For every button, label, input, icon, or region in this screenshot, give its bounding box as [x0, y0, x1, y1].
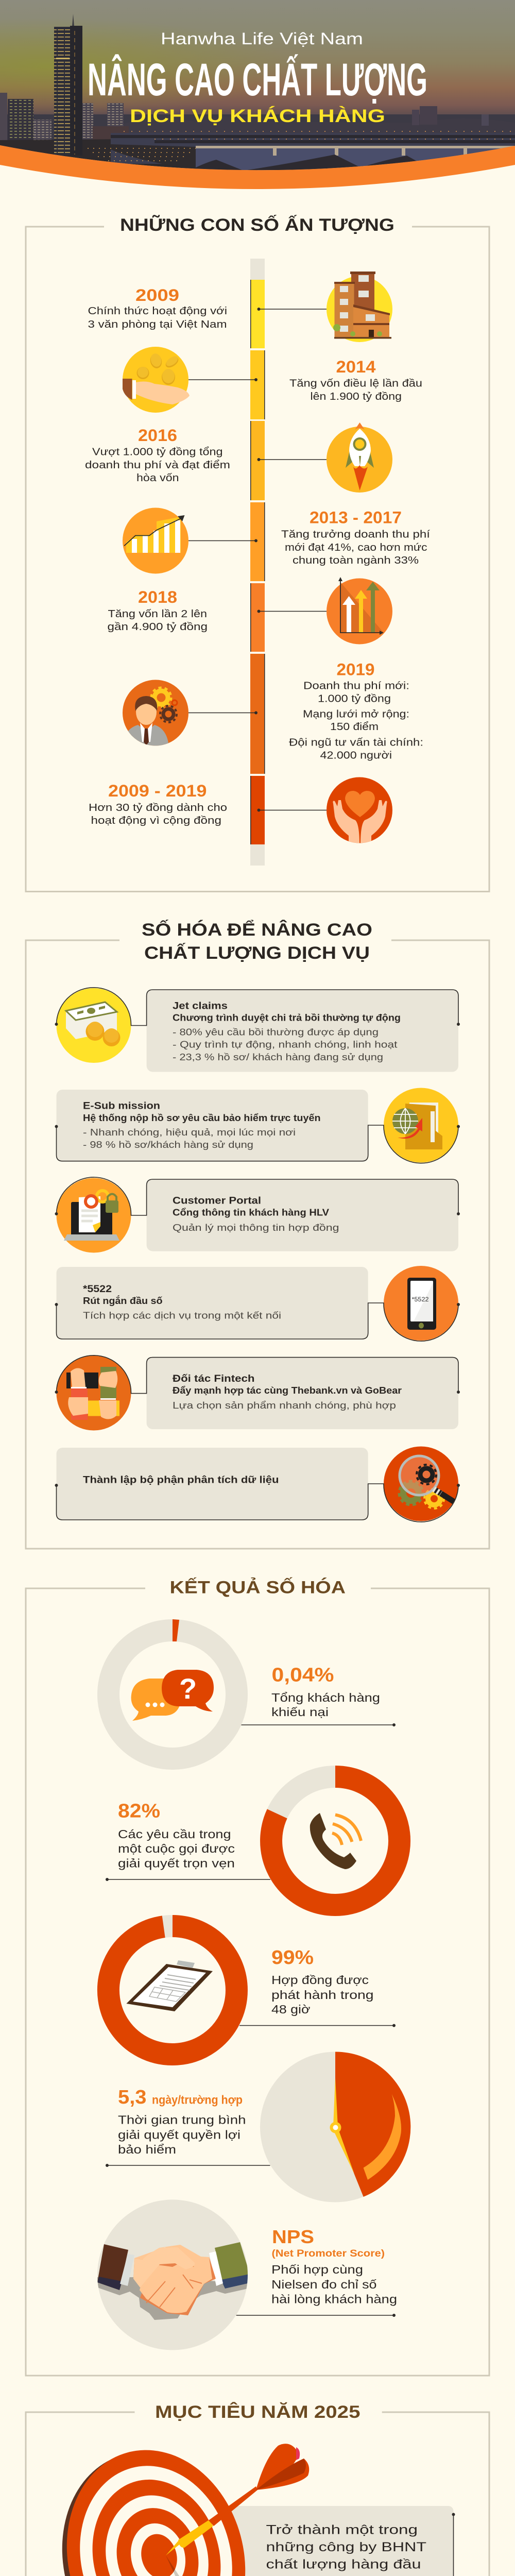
- milestone 2009-2019 text: [89, 782, 227, 826]
- result text: 5,3 days per case: [118, 2087, 246, 2156]
- milestone 2014 text: Tăng vốn điều lệ lần đầu: [289, 378, 422, 389]
- milestone 2016 text: doanh thu phí và đạt điểm: [85, 460, 230, 471]
- icon: hand with coins: [123, 347, 190, 413]
- card text: Tích hợp các dịch vụ trong một kết nối: [83, 1311, 281, 1321]
- milestone 2014 text: 2014: [336, 358, 376, 376]
- icon: clipboard: [126, 1960, 213, 2011]
- result text: NPS: Phối hợp cùng: [271, 2263, 363, 2276]
- icon: businessman with gears: [123, 680, 188, 747]
- card text: Hệ thống nộp hồ sơ yêu cầu bảo hiểm trực tuyến: [83, 1113, 320, 1123]
- card text: Cổng thông tin khách hàng HLV: [173, 1208, 329, 1218]
- heading: số hóa để nâng cao chất lượng dịch vụ: SỐ HÓA ĐỂ NÂNG CAO: [142, 920, 372, 940]
- card text: - Quy trình tự động, nhanh chóng, linh hoạt: [173, 1040, 398, 1050]
- result text: 5,3 days per case: 5,3: [118, 2087, 146, 2108]
- hero orange swoosh: [0, 145, 515, 189]
- card: E-Sub mission: [55, 1088, 460, 1163]
- milestone 2019 text: 1.000 tỷ đồng: [318, 693, 391, 705]
- NPS circle with handshake: [97, 2200, 252, 2350]
- result text: 82%: [118, 1800, 235, 1870]
- milestone 2009-2019 text: Hơn 30 tỷ đồng dành cho: [89, 802, 227, 814]
- brand line: Hanwha Life Việt Nam: [161, 29, 363, 48]
- result text: 5,3 days per case: bảo hiểm: [118, 2143, 176, 2156]
- milestone 2018 text: gần 4.900 tỷ đồng: [107, 621, 208, 633]
- panel: timeline section: [26, 215, 489, 891]
- card text: Jet claims: [173, 1001, 228, 1012]
- milestone 2016 text: [85, 426, 230, 484]
- icon: cash and coins: [66, 1002, 121, 1046]
- card text: [173, 1374, 402, 1411]
- heading: số hóa để nâng cao chất lượng dịch vụ: CHẤT LƯỢNG DỊCH VỤ: [144, 943, 370, 963]
- hero title block: [88, 29, 427, 126]
- icon: hands holding heart: [327, 777, 392, 845]
- result text: 0,04%: 0,04%: [272, 1664, 334, 1686]
- milestone 2018 text: Tăng vốn lần 2 lên: [108, 608, 207, 620]
- callout: goal statement: những công by BHNT: [266, 2540, 426, 2554]
- result text: 0,04%: khiếu nại: [271, 1705, 329, 1719]
- icon: laptop, document, lock: [64, 1191, 119, 1241]
- milestone 2014 text: lên 1.900 tỷ đồng: [310, 391, 402, 402]
- milestone 2018 text: 2018: [138, 588, 177, 606]
- card text: [83, 1100, 320, 1150]
- card text: - 98 % hồ sơ/khách hàng sử dụng: [83, 1140, 253, 1150]
- milestone 2019 text: Đội ngũ tư vấn tài chính:: [289, 737, 423, 748]
- result connector lines: [106, 1723, 396, 2317]
- result text: 5,3 days per case: ngày/trường hợp: [152, 2093, 243, 2106]
- result text: NPS: [271, 2226, 397, 2306]
- icon: four joined hands: [66, 1367, 119, 1420]
- milestone 2009 text: 2009: [135, 286, 179, 304]
- donut chart: 0,04%: [108, 1619, 237, 1759]
- icon: rising arrows: [327, 577, 392, 644]
- result text: 99%: 99%: [271, 1947, 314, 1969]
- milestone 2016 text: Vượt 1.000 tỷ đồng tổng: [92, 446, 222, 457]
- timeline connectors: [188, 308, 327, 812]
- result text: 99%: phát hành trong: [271, 1988, 374, 2002]
- card: data analytics: [55, 1447, 460, 1522]
- hero banner: city skyline at dusk: [0, 0, 515, 178]
- heading: kết quả số hóa: KẾT QUẢ SỐ HÓA: [170, 1578, 346, 1597]
- clock chart: 5,3 days: [260, 2052, 410, 2202]
- callout: goal statement: chất lượng hàng đầu: [266, 2557, 421, 2572]
- card text: E-Sub mission: [83, 1100, 160, 1112]
- dart: [166, 2444, 309, 2555]
- subtitle: DỊCH VỤ KHÁCH HÀNG: [130, 106, 385, 126]
- milestone 2009-2019 text: hoạt động vì cộng đồng: [91, 815, 221, 826]
- milestone 2019 text: Doanh thu phí mới:: [303, 680, 409, 691]
- card text: Customer Portal: [173, 1195, 261, 1207]
- card text: - 23,3 % hồ sơ/ khách hàng đang sử dụng: [173, 1052, 383, 1062]
- card text: Đối tác Fintech: [173, 1374, 254, 1384]
- milestone 2009-2019 text: 2009 - 2019: [108, 782, 207, 800]
- icon: office building: [327, 272, 392, 342]
- icon: telephone: [310, 1813, 361, 1869]
- result text: 5,3 days per case: Thời gian trung bình: [118, 2113, 246, 2127]
- result text: NPS: hài lòng khách hàng: [271, 2293, 397, 2306]
- card text: [83, 1284, 281, 1321]
- milestone 2013-2017 text: 2013 - 2017: [310, 508, 402, 527]
- callout: goal statement: Trở thành một trong: [266, 2522, 418, 2537]
- heading: những con số ấn tượng: NHỮNG CON SỐ ẤN TƯỢNG: [120, 215, 394, 235]
- card text: Đẩy mạnh hợp tác cùng Thebank.vn và GoBear: [173, 1385, 402, 1396]
- milestone 2013-2017 text: chung toàn ngành 33%: [293, 555, 419, 566]
- milestone 2019 text: 42.000 người: [320, 750, 392, 761]
- panel: digitisation section: [26, 920, 489, 1549]
- icon: folder and globe: [392, 1103, 442, 1149]
- result text: 82%: một cuộc gọi được: [118, 1842, 235, 1855]
- card text: Quản lý mọi thông tin hợp đồng: [173, 1223, 339, 1233]
- milestone 2018 text: [107, 588, 208, 633]
- milestone 2019 text: Mạng lưới mở rộng:: [303, 709, 409, 720]
- panel: results section: [26, 1578, 489, 2376]
- icon: handshake: [97, 2242, 252, 2320]
- icon: magnifier and gears: [399, 1456, 458, 1509]
- card text: Chương trình duyệt chi trả bồi thường tự động: [173, 1013, 401, 1023]
- result text: 5,3 days per case: giải quyết quyền lợi: [118, 2128, 241, 2141]
- card: *5522: [55, 1266, 460, 1341]
- card text: - 80% yêu cầu bồi thường được áp dụng: [173, 1027, 379, 1038]
- callout: goal statement: [221, 2506, 455, 2576]
- milestone 2013-2017 text: [281, 508, 431, 566]
- donut chart: 99%: [108, 1926, 237, 2055]
- heading: mục tiêu năm 2025: MỤC TIÊU NĂM 2025: [155, 2402, 360, 2422]
- icon: speech bubbles: ?: [179, 1672, 197, 1705]
- card: Customer Portal: [55, 1177, 460, 1253]
- milestone 2009 text: Chính thức hoạt động với: [88, 306, 227, 317]
- milestone 2013-2017 text: Tăng trưởng doanh thu phí: [281, 529, 431, 540]
- card text: [173, 1001, 401, 1062]
- milestone 2016 text: 2016: [138, 426, 177, 445]
- milestone 2019 text: [289, 660, 423, 761]
- icon: smartphone: [407, 1278, 436, 1330]
- result text: 99%: Hợp đồng được: [271, 1973, 369, 1987]
- card text: *5522: [83, 1284, 112, 1295]
- result text: 0,04%: [271, 1664, 380, 1719]
- icon: growth chart: [123, 508, 188, 574]
- card text: Thành lập bộ phận phân tích dữ liệu: [83, 1475, 279, 1486]
- milestone 2009 text: 3 văn phòng tại Việt Nam: [88, 319, 227, 330]
- result text: 82%: giải quyết trọn vẹn: [118, 1857, 235, 1870]
- icon: speech bubbles: [131, 1670, 214, 1721]
- panel: 2025 goal section: [26, 2402, 489, 2576]
- result text: 99%: [271, 1947, 374, 2016]
- heading: số hóa để nâng cao chất lượng dịch vụ: [142, 920, 372, 963]
- milestone 2019 text: 150 điểm: [330, 721, 379, 733]
- donut chart: 82%: [271, 1776, 400, 1905]
- icon: target board with dart: [62, 2444, 309, 2576]
- milestone 2009 text: [88, 286, 227, 330]
- result text: NPS: (Net Promoter Score): [272, 2248, 385, 2259]
- result text: 0,04%: Tổng khách hàng: [271, 1691, 380, 1704]
- result text: 82%: 82%: [118, 1800, 160, 1822]
- milestone 2019 text: 2019: [337, 660, 375, 679]
- milestone 2013-2017 text: mới đạt 41%, cao hơn mức: [285, 542, 427, 553]
- timeline bar: [250, 259, 265, 866]
- icon: rocket: [327, 422, 392, 493]
- milestone 2016 text: hòa vốn: [136, 472, 179, 484]
- result text: NPS: Nielsen đo chỉ số: [271, 2278, 377, 2291]
- milestone 2014 text: [289, 358, 422, 402]
- card text: Lựa chọn sản phẩm nhanh chóng, phù hợp: [173, 1400, 396, 1411]
- card text: [173, 1195, 339, 1233]
- icon: smartphone: *5522: [412, 1296, 429, 1303]
- card text: - Nhanh chóng, hiệu quả, mọi lúc mọi nơi: [83, 1127, 296, 1138]
- result text: 82%: Các yêu cầu trong: [118, 1827, 231, 1841]
- result text: NPS: NPS: [272, 2226, 314, 2247]
- card: Fintech partners: [55, 1355, 460, 1430]
- card: Jet claims: [55, 988, 460, 1072]
- result text: 99%: 48 giờ: [271, 2003, 310, 2016]
- card text: Rút ngắn đầu số: [83, 1295, 163, 1306]
